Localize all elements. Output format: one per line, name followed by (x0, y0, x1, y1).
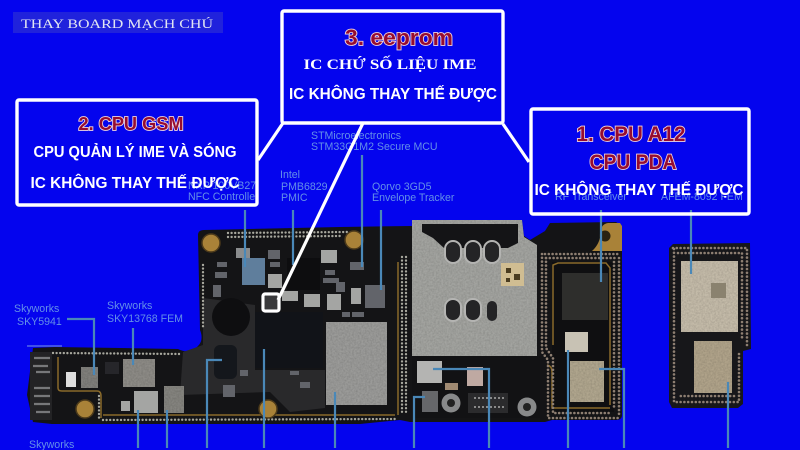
callout 1: CPU A12: IC KHÔNG THAY THẾ ĐƯỢC (534, 181, 744, 199)
title badge: THAY BOARD MẠCH CHÚ (21, 17, 213, 31)
chips below shield (417, 361, 536, 416)
right module board (669, 243, 751, 408)
faint chip labels: SKY13768 FEM (107, 313, 183, 325)
faint chip labels: PMB6829 (281, 181, 328, 193)
faint chip labels: Qorvo 3GD5 (372, 181, 432, 193)
callout 3: eeprom: IC KHÔNG THAY THẾ ĐƯỢC (289, 85, 497, 103)
callout 2: CPU GSM (17, 100, 257, 205)
mounting holes (76, 223, 622, 418)
callout 3: eeprom: 3. eeprom (345, 25, 453, 50)
callout 2: CPU GSM: IC KHÔNG THAY THẾ ĐƯỢC (30, 174, 240, 192)
marker: eeprom chip highlight (263, 294, 279, 311)
chips on right of board (562, 273, 608, 402)
faint chip labels: Envelope Tracker (372, 192, 455, 204)
faint chip labels: RF Transceiver (555, 191, 627, 203)
board texture patches (58, 262, 614, 418)
faint chip labels: AFEM-8092 FEM (661, 191, 743, 203)
main logic board (27, 220, 622, 424)
callout 1: CPU A12: CPU PDA (590, 151, 676, 174)
solder point rows (53, 232, 620, 420)
faint chip labels: SKY5941 (17, 316, 62, 328)
chips on left and centre of board (66, 248, 387, 413)
callout 2: CPU GSM: CPU QUẢN LÝ IME VÀ SÓNG (34, 143, 236, 161)
callout 3: eeprom (282, 11, 503, 123)
faint chip labels: STM33G1M2 Secure MCU (311, 141, 438, 153)
callout 1: CPU A12: 1. CPU A12 (576, 123, 686, 146)
faint chip labels: Skyworks (107, 300, 152, 312)
left connector (27, 346, 62, 420)
faint chip labels: STMicroelectronics (311, 130, 401, 142)
faint chip labels (14, 130, 743, 450)
faint chip labels: NFC Controller (188, 191, 259, 203)
title badge (13, 12, 223, 33)
pointer lines to chips (67, 155, 728, 448)
SIM tray shield (412, 220, 537, 356)
faint chip labels: NXP 100VB27 (188, 180, 256, 192)
callout 2: CPU GSM: 2. CPU GSM (78, 114, 184, 134)
faint chip labels: Intel (280, 169, 300, 181)
callout 3: eeprom: IC CHỨ SỐ LIỆU IME (304, 55, 476, 73)
callout 1: CPU A12 (531, 109, 749, 214)
faint chip labels: PMIC (281, 192, 308, 204)
faint chip labels: Skyworks (14, 303, 59, 315)
callout connector lines (258, 123, 529, 300)
